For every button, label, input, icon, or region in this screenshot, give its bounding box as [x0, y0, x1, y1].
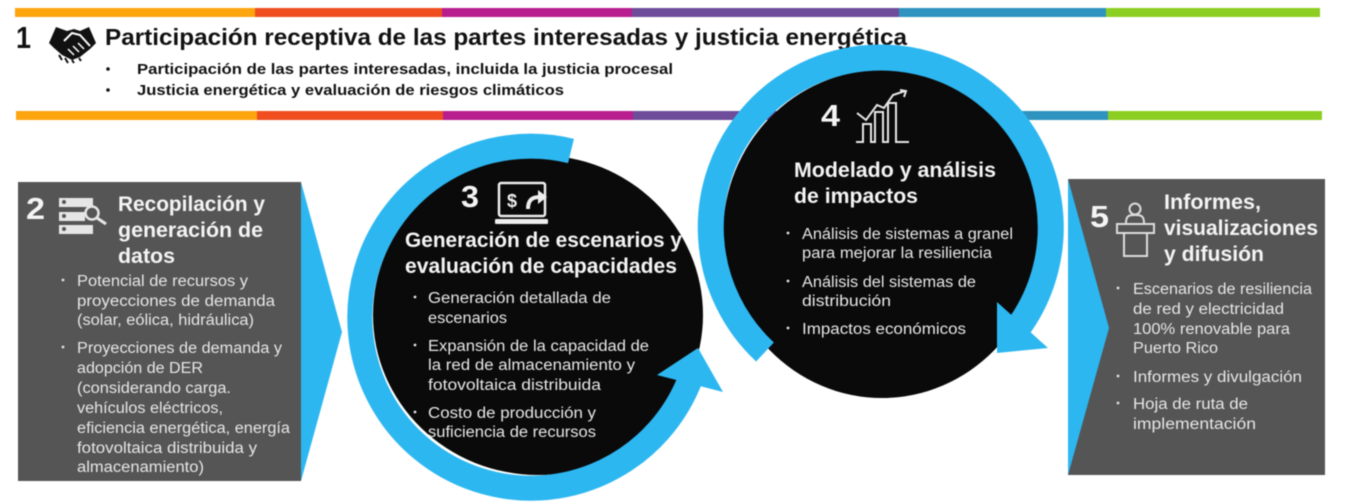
- bullet list: Escenarios de resiliencia: [1133, 281, 1312, 298]
- bullet list: Impactos económicos: [802, 321, 966, 338]
- icon: database search: [59, 198, 106, 234]
- bullet list: Potencial de recursos y: [77, 273, 248, 290]
- bullet list: Generación detallada de: [428, 290, 611, 307]
- bullet list: implementación: [1133, 416, 1256, 433]
- step number 5: 5: [1090, 199, 1109, 234]
- heading: visualizaciones: [1164, 217, 1318, 240]
- bullet list: (considerando carga.: [77, 380, 231, 397]
- bullet list: de red y electricidad: [1133, 301, 1284, 318]
- step number 2: 2: [26, 191, 45, 226]
- circular arrow ring: [711, 57, 1051, 353]
- heading: [1164, 191, 1318, 266]
- heading: Recopilación y: [118, 193, 265, 216]
- panel 3: scenario generation circle: [360, 146, 723, 488]
- bullet list: para mejorar la resiliencia: [802, 245, 992, 262]
- bullet list: (solar, eólica, hidráulica): [77, 312, 254, 329]
- bullet list: Participación de las partes interesadas, incluida la justicia procesal: [137, 62, 673, 78]
- bullet list: vehículos eléctricos,: [77, 400, 223, 417]
- bullet list: [62, 273, 290, 476]
- bullet list: proyecciones de demanda: [77, 293, 275, 310]
- bullet list: Análisis del sistemas de: [802, 274, 976, 291]
- bullet list: [106, 62, 673, 99]
- step number 3: 3: [461, 179, 479, 214]
- bullet list: 100% renovable para: [1133, 321, 1290, 338]
- heading: generación de: [118, 219, 263, 242]
- heading: de impactos: [794, 185, 918, 208]
- arrow to step 3: [301, 182, 342, 481]
- panel 5: reports and dissemination: [1068, 179, 1325, 475]
- icon: rising chart: [856, 90, 909, 142]
- icon: handshake: [49, 27, 96, 63]
- icon: laptop with dollar: [495, 183, 548, 224]
- bullet list: Informes y divulgación: [1133, 369, 1302, 386]
- bullet list: [1117, 281, 1312, 433]
- bullet list: [787, 226, 1013, 338]
- bullet list: Expansión de la capacidad de: [428, 338, 649, 355]
- bullet list: Justicia energética y evaluación de riesgos climáticos: [137, 83, 564, 99]
- bullet list: Hoja de ruta de: [1133, 396, 1248, 413]
- bullet list: la red de almacenamiento y: [428, 357, 635, 374]
- heading: [405, 229, 682, 278]
- heading: datos: [118, 245, 175, 268]
- bullet list: Costo de producción y: [428, 405, 596, 422]
- step number 4: 4: [821, 98, 841, 133]
- heading: evaluación de capacidades: [405, 255, 677, 278]
- circular arrow ring: [360, 146, 723, 488]
- heading: [794, 159, 996, 208]
- heading: Generación de escenarios y: [405, 229, 682, 252]
- bullet list: escenarios: [428, 310, 507, 327]
- bullet list: Proyecciones de demanda y: [77, 340, 282, 357]
- bullet list: adopción de DER: [77, 360, 203, 377]
- step number 1: 1: [16, 20, 31, 55]
- heading: [118, 193, 265, 268]
- top rainbow bar: [15, 8, 1320, 17]
- bullet list: suficiencia de recursos: [428, 424, 596, 441]
- icon: laptop with dollar: $: [507, 191, 517, 211]
- heading: Informes,: [1164, 191, 1261, 214]
- bullet list: eficiencia energética, energía: [77, 420, 290, 437]
- bullet list: [414, 290, 649, 441]
- bullet list: distribución: [802, 293, 891, 310]
- bullet list: Puerto Rico: [1133, 340, 1218, 357]
- bottom rainbow bar: [16, 111, 1322, 120]
- bullet list: fotovoltaica distribuida: [428, 377, 601, 394]
- panel 4: modelling circle: [711, 57, 1051, 398]
- heading: y difusión: [1164, 243, 1264, 266]
- bullet list: fotovoltaica distribuida y: [77, 440, 257, 457]
- panel 2: data collection: [18, 182, 342, 481]
- icon: speaker at podium: [1117, 204, 1154, 256]
- panel 1: participation header: [16, 20, 908, 99]
- bullet list: almacenamiento): [77, 459, 204, 476]
- heading: Modelado y análisis: [794, 159, 996, 182]
- arrow from step 4: [1068, 179, 1109, 475]
- heading: Participación receptiva de las partes interesadas y justicia energética: [105, 24, 908, 50]
- bullet list: Análisis de sistemas a granel: [802, 226, 1013, 243]
